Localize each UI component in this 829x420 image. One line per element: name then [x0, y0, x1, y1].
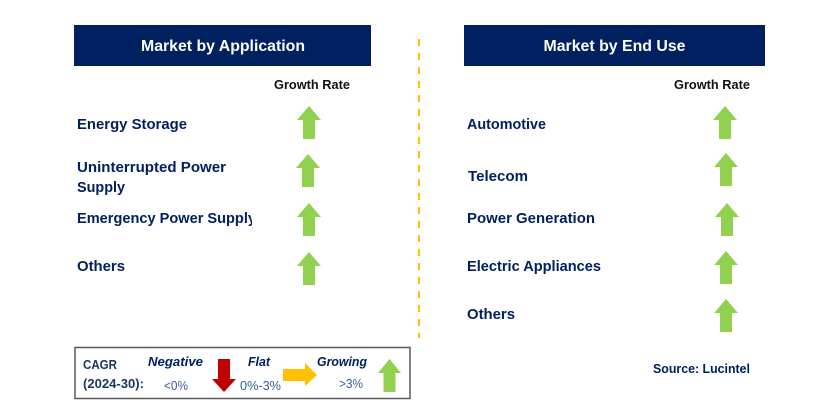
legend: negative: <0% — [164, 378, 188, 393]
label: others, application: Others — [77, 258, 125, 275]
legend title — [83, 357, 144, 391]
icon: growth arrow, uninterrupted power supply — [296, 154, 320, 187]
label: uninterrupted power supply: Uninterrupted Power — [77, 159, 226, 176]
icon: growth arrow, electric appliances — [714, 251, 738, 284]
legend: flat — [240, 354, 317, 393]
legend title: CAGR — [83, 357, 118, 372]
legend: flat: 0%-3% — [240, 378, 281, 393]
icon: growth arrow, others end use — [714, 299, 738, 332]
icon: growth arrow, emergency power supply — [297, 203, 321, 236]
legend: flat: Flat — [248, 354, 271, 369]
icon: growth arrow, automotive — [713, 106, 737, 139]
legend: growing — [317, 354, 401, 392]
label: energy storage: Energy Storage — [77, 116, 187, 133]
label: telecom: Telecom — [468, 168, 528, 185]
legend: growing: Growing — [317, 354, 367, 369]
label: electric appliances: Electric Appliances — [467, 258, 601, 275]
legend: negative: Negative — [148, 354, 203, 369]
label: uninterrupted power supply — [77, 159, 226, 196]
icon: growth arrow, others application — [297, 252, 321, 285]
icon: yellow right arrow — [283, 363, 317, 386]
column label: growth rate: Growth Rate — [674, 77, 750, 92]
label: others, end use: Others — [467, 306, 515, 323]
icon: growth arrow, energy storage — [297, 106, 321, 139]
heading: market by end use — [464, 25, 765, 66]
legend: CAGR — [75, 348, 410, 398]
icon: growth arrow, telecom — [714, 153, 738, 186]
column label: growth rate: Growth Rate — [274, 77, 350, 92]
icon: growth arrow, power generation — [715, 203, 739, 236]
legend: growing: >3% — [339, 376, 363, 391]
label: emergency power supply: Emergency Power Supply — [77, 210, 257, 227]
heading: market by end use: Market by End Use — [544, 38, 686, 55]
heading: market by application — [74, 25, 371, 66]
icon: green up arrow — [378, 359, 401, 392]
source note: Source: Lucintel — [653, 361, 750, 376]
panel: market by end use — [464, 25, 765, 332]
panel: market by application — [74, 25, 371, 285]
heading: market by application: Market by Application — [141, 38, 305, 55]
legend: negative — [148, 354, 236, 393]
label: power generation: Power Generation — [467, 210, 595, 227]
label: automotive: Automotive — [467, 116, 546, 133]
label: uninterrupted power supply: Supply — [77, 179, 126, 196]
legend title: (2024-30): — [83, 376, 144, 391]
icon: red down arrow — [212, 359, 236, 392]
